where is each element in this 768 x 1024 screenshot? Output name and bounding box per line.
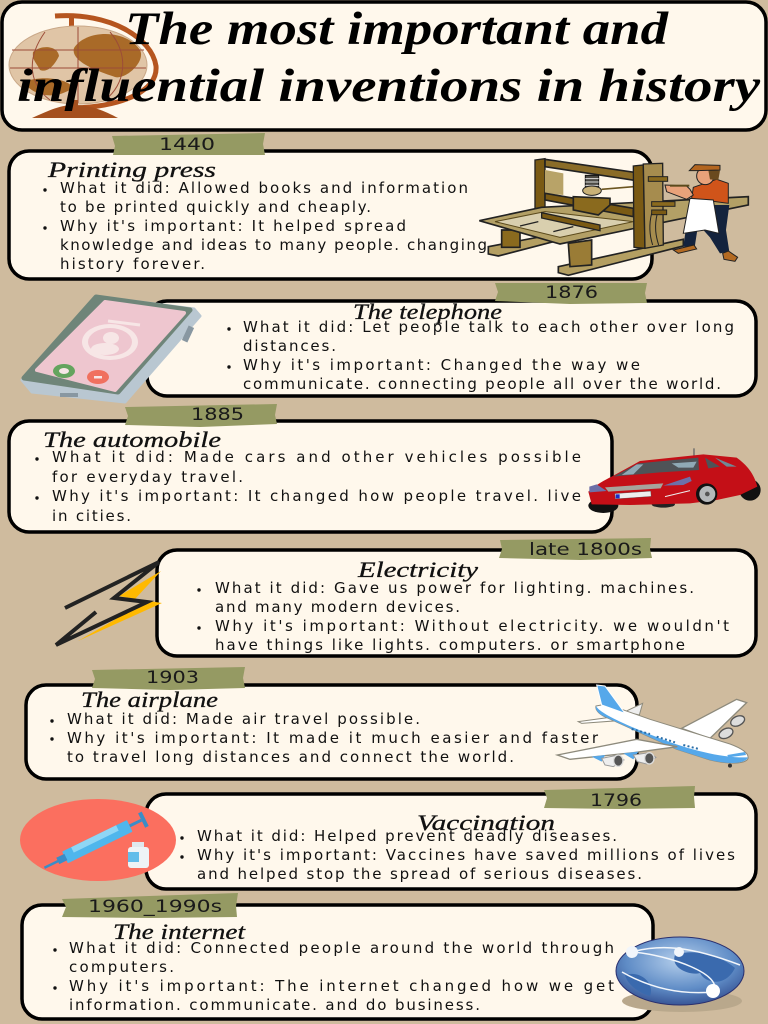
description: internet: information. communicate. and do business. (69, 996, 480, 1014)
panel: telephone (22, 283, 756, 402)
year tag: 1796: 1796 (590, 791, 642, 811)
panel: automobile (9, 404, 761, 532)
panel: internet (22, 893, 744, 1019)
heading: printing press: Printing press (47, 157, 216, 182)
heading: automobile: The automobile (43, 427, 221, 452)
description: internet: What it did: Connected people around the world through (69, 939, 614, 957)
description: telephone (227, 318, 734, 393)
title text: The most important and (125, 3, 670, 55)
description: internet: Why it's important: The internet changed how we get (69, 977, 614, 995)
description: automobile: for everyday travel. (52, 468, 243, 486)
description: airplane: Why it's important: It made it much easier and faster (67, 729, 599, 747)
description: printing press: Why it's important: It helped spread (60, 217, 406, 235)
description: electricity: have things like lights. computers. or smartphone (215, 636, 685, 654)
heading: airplane: The airplane (81, 687, 218, 712)
description: automobile: in cities. (52, 507, 131, 525)
heading: electricity: Electricity (357, 557, 478, 582)
year tag: 1960_1990s: 1960_1990s (88, 897, 222, 917)
panel: vaccination (20, 786, 756, 889)
year tag: 1440: 1440 (159, 135, 215, 155)
description: electricity: Why it's important: Without electricity. we wouldn't (215, 617, 729, 635)
description: printing press: knowledge and ideas to many people. changing (60, 236, 487, 254)
description: electricity: and many modern devices. (215, 598, 460, 616)
description: printing press (43, 179, 487, 273)
description: telephone: Why it's important: Changed the way we (243, 356, 640, 374)
year tag: 1885: 1885 (191, 405, 244, 425)
year tag: 1903: 1903 (146, 668, 199, 688)
icon: globe (9, 16, 156, 118)
heading: vaccination: Vaccination (417, 810, 555, 835)
year tag: 1876: 1876 (545, 283, 598, 303)
description: printing press: history forever. (60, 255, 205, 273)
description: electricity (197, 579, 729, 654)
description: automobile (35, 448, 581, 525)
panel: printing press (9, 133, 748, 279)
heading: internet: The internet (113, 919, 246, 944)
icon: network globe (616, 937, 744, 1012)
description: automobile: Why it's important: It changed how people travel. live (52, 487, 581, 505)
heading: telephone: The telephone (353, 299, 502, 324)
description: automobile: What it did: Made cars and other vehicles possible (52, 448, 581, 466)
description: printing press: to be printed quickly and cheaply. (60, 198, 371, 216)
panel: airplane (26, 667, 748, 779)
description: internet (53, 939, 614, 1014)
description: airplane (50, 710, 599, 766)
description: vaccination: Why it's important: Vaccines have saved millions of lives (197, 846, 735, 864)
description: vaccination (180, 827, 735, 883)
year tag: 1885 (125, 404, 277, 427)
description: airplane: What it did: Made air travel possible. (67, 710, 420, 728)
title panel (2, 2, 766, 130)
title text: influential inventions in history (17, 60, 760, 112)
year tag: 1876 (495, 283, 647, 304)
icon: syringe and vial (20, 799, 176, 881)
year tag: 1440 (112, 133, 265, 155)
icon: printing press with printer (479, 159, 748, 275)
description: telephone: What it did: Let people talk to each other over long (243, 318, 734, 336)
description: printing press: What it did: Allowed books and information (60, 179, 468, 197)
description: telephone: communicate. connecting people all over the world. (243, 375, 721, 393)
description: airplane: to travel long distances and connect the world. (67, 748, 514, 766)
title text (17, 3, 760, 112)
description: internet: computers. (69, 958, 174, 976)
year tag: 1796 (544, 786, 695, 811)
year tag: 1960_1990s (62, 893, 238, 918)
icon: red car (588, 448, 761, 513)
description: vaccination: and helped stop the spread of serious diseases. (197, 865, 642, 883)
description: vaccination: What it did: Helped prevent deadly diseases. (197, 827, 617, 845)
icon: airplane (557, 685, 748, 768)
panel: electricity (56, 538, 756, 656)
description: electricity: What it did: Gave us power for lighting. machines. (215, 579, 694, 597)
description: telephone: distances. (243, 337, 336, 355)
icon: smartphone (22, 297, 200, 402)
year tag: 1903 (92, 667, 245, 690)
year tag: late 1800s: late 1800s (529, 540, 642, 560)
year tag: late 1800s (499, 538, 652, 560)
icon: lightning bolt (56, 562, 162, 645)
